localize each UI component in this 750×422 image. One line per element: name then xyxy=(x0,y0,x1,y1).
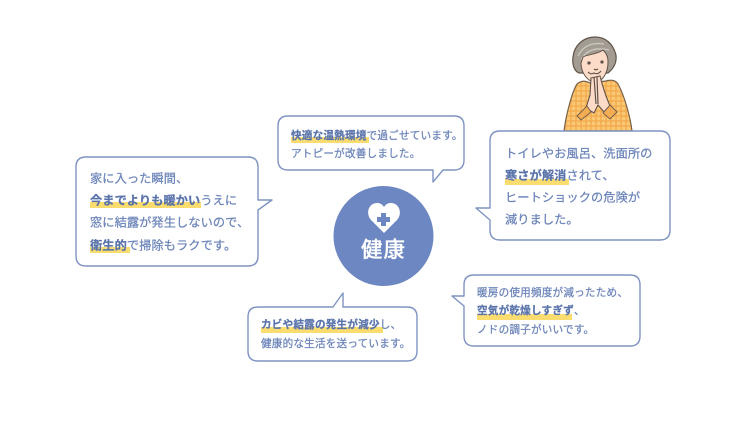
text: 今までよりも暖かいうえに xyxy=(90,192,237,208)
speech bubble: bathroom cold relieved xyxy=(476,131,670,240)
bubble outline xyxy=(278,116,464,182)
highlight xyxy=(291,137,369,143)
text xyxy=(90,172,249,252)
woman's hair xyxy=(573,37,616,73)
heading: 健康 xyxy=(361,238,406,262)
text: 窓に結露が発生しないので、 xyxy=(90,214,249,230)
text: 健康的な生活を送っています。 xyxy=(261,337,411,350)
bubble outline xyxy=(476,131,670,240)
speech bubble: warm and no condensation xyxy=(76,157,272,266)
speech bubble: comfortable temperature xyxy=(278,116,464,182)
hair highlights xyxy=(578,44,609,60)
text xyxy=(261,318,411,350)
text: 家に入った瞬間、 xyxy=(90,172,188,186)
speech bubble: air not too dry xyxy=(452,275,640,346)
central health circle xyxy=(334,186,434,286)
highlight xyxy=(261,327,383,333)
bubble outline xyxy=(76,157,272,266)
highlight xyxy=(477,314,572,320)
text xyxy=(477,286,628,336)
text xyxy=(505,146,652,226)
bubble outline xyxy=(452,275,640,346)
finger lines xyxy=(594,77,598,104)
highlight xyxy=(505,179,569,185)
text: 快適な温熱環境で過ごせています。 xyxy=(291,129,463,142)
text: 空気が乾燥しすぎず、 xyxy=(477,304,585,317)
woman's face xyxy=(581,50,608,82)
text: トイレやお風呂、洗面所の xyxy=(505,146,652,160)
text: ヒートショックの危険が xyxy=(505,190,640,204)
woman's cardigan xyxy=(564,80,632,131)
woman's facial features xyxy=(588,61,603,74)
text: カビや結露の発生が減少し、 xyxy=(261,318,401,331)
bubble outline xyxy=(248,293,417,361)
highlights xyxy=(90,202,201,253)
text: 寒さが解消されて、 xyxy=(505,168,615,182)
icon: heart with plus xyxy=(368,203,400,233)
woman's sleeve cuffs xyxy=(577,105,617,120)
text: 衛生的で掃除もラクです。 xyxy=(90,238,236,252)
text: 減りました。 xyxy=(505,212,579,226)
text: アトピーが改善しました。 xyxy=(291,147,421,160)
text xyxy=(291,129,463,160)
text: 暖房の使用頻度が減ったため、 xyxy=(477,286,628,299)
circle xyxy=(334,186,434,286)
text: ノドの調子がいいです。 xyxy=(477,323,594,336)
woman's hands xyxy=(586,76,610,113)
speech bubble: less mold and condensation xyxy=(248,293,417,361)
illustration: elderly woman with hands together xyxy=(564,37,632,131)
